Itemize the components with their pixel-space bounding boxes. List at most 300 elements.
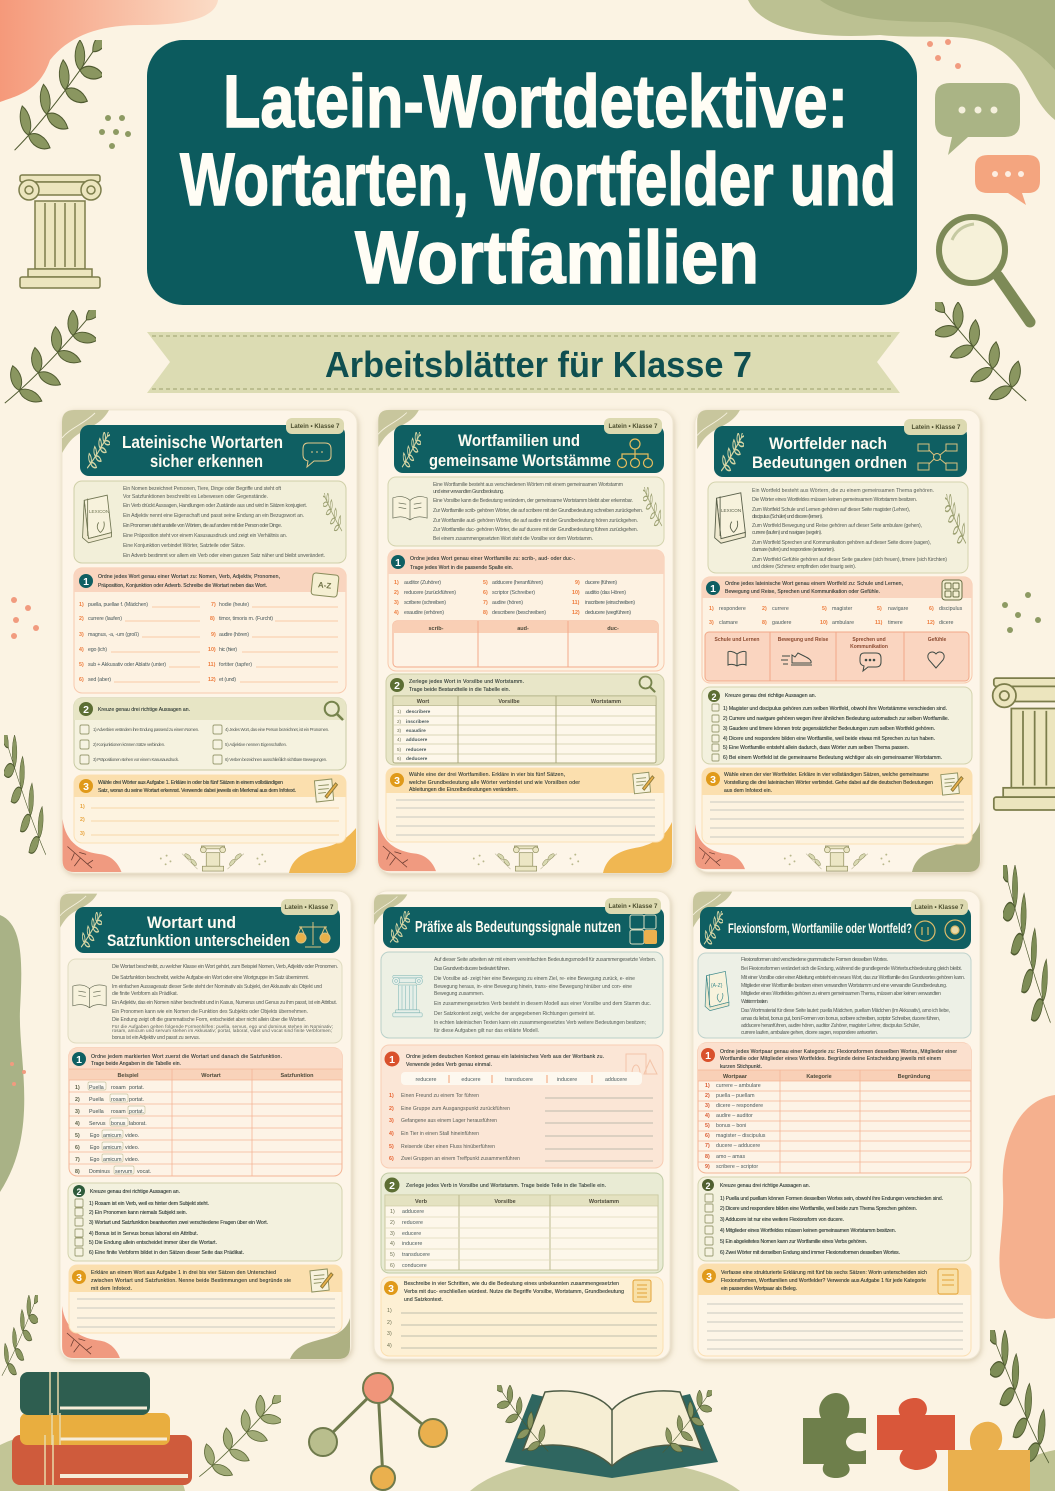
- exercise 3: Verbs mit duc- erschließen würdest. Nutze die Begriffe Vorsilbe, Wortstamm, Grundbedeutung: [404, 1289, 624, 1295]
- info box: Die Vorsilbe ad- zeigt hier eine Bewegung zu einem Ziel, re- eine Bewegung zurück, e- eine: [434, 976, 635, 982]
- exercise 1: 1): [709, 606, 714, 612]
- exercise 1 table: Ordne jedes Wortpaar genau einer Kategorie zu: Flexionsformen desselben Wortes, Mitglieder einer: [720, 1049, 957, 1055]
- exercise 2: 3) Gaudere und timere können trotz gegensätzlicher Bedeutungen zum selben Wortfeld gehören.: [723, 726, 935, 732]
- exercise 2: deducere: [406, 756, 428, 762]
- exercise 1: Trage jedes Wort in die passende Spalte ein.: [410, 565, 513, 571]
- exercise 3: 2): [387, 1320, 392, 1326]
- exercise 1 table: bonus – boni: [716, 1123, 746, 1129]
- exercise 1 table: Wortpaar: [723, 1074, 748, 1080]
- exercise 2: [68, 1183, 342, 1261]
- exercise 2: reducere: [406, 747, 427, 753]
- info box: [381, 952, 663, 1038]
- exercise 1: 11): [208, 662, 216, 668]
- info box: und einer verwandten Grundbedeutung.: [433, 489, 504, 495]
- exercise 1: ego (ich): [88, 647, 107, 653]
- exercise 3: Satz, woran du seine Wortart erkennst. Verwende dabei jeweils ein Merkmal aus dem Infotext.: [98, 788, 296, 794]
- exercise 3: Erkläre an einem Wort aus Aufgabe 1 in drei bis vier Sätzen den Unterschied: [91, 1270, 276, 1276]
- exercise 1: discipulus: [939, 606, 963, 612]
- exercise 1 table: Wortart: [201, 1073, 221, 1079]
- exercise 2: inducere: [402, 1241, 422, 1247]
- exercise 1: inscribere (einschreiben): [585, 600, 635, 606]
- header: Satzfunktion unterscheiden: [107, 931, 290, 950]
- exercise 1: 2): [394, 590, 399, 596]
- exercise 2: 2): [397, 719, 402, 724]
- panel: worksheet 6 Flexionsform: [693, 891, 980, 1359]
- exercise 1: 1: [395, 557, 401, 569]
- exercise 1 table: Wortfamilie oder Mitglieder eines Wortfeldes. Begründe deine Entscheidung jeweils mit einem: [720, 1056, 941, 1062]
- info box: amas du liebst, bonus gut, boni Formen von bonus, scribere schreiben, scriptor Schreiber, ducere führen,: [741, 1016, 940, 1022]
- exercise 3: 1): [80, 804, 85, 810]
- header: Wortfelder nach: [769, 434, 887, 453]
- header: gemeinsame Wortstämme: [429, 451, 611, 470]
- exercise 1: 11): [572, 600, 580, 606]
- exercise 1 table: kurzen Stichpunkt.: [720, 1064, 762, 1070]
- header: sicher erkennen: [150, 451, 263, 471]
- exercise 1: scrib-: [429, 626, 444, 632]
- exercise 1 table: Ordne jedem markierten Wort zuerst die Wortart und danach die Satzfunktion.: [91, 1054, 282, 1060]
- exercise 3: 3): [387, 1331, 392, 1337]
- info box: Das Wortmaterial für diese Seite lautet: puella Mädchen, puellam Mädchen (im Akkusativ), amo ich liebe,: [741, 1008, 950, 1014]
- exercise 2: Kreuze genau drei richtige Aussagen an.: [720, 1183, 810, 1189]
- exercise 1 table: 1): [75, 1085, 80, 1091]
- exercise 2: 2) Ein Pronomen kann niemals Subjekt sein.: [89, 1210, 187, 1216]
- info box: Mit einer Vorsilbe oder einer Ableitung entsteht ein neues Wort, das zur Wortfamilie des Grundwortes gehören kann.: [741, 975, 965, 981]
- exercise 1: scribere (schreiben): [404, 600, 446, 606]
- exercise 1 table: Ego: [90, 1157, 99, 1163]
- info box: Zum Wortfeld Bewegung und Reise gehören auf dieser Seite ambulare (gehen),: [752, 523, 922, 529]
- info box: Ein Adjektiv, das ein Nomen näher beschreibt und in Kasus, Numerus und Genus zu ihm passt, ist ein Attribut.: [112, 1000, 337, 1006]
- exercise 3: 4): [387, 1343, 392, 1349]
- info box: [388, 477, 664, 546]
- exercise 2: 2: [394, 680, 400, 692]
- exercise 2: describere: [406, 709, 431, 715]
- exercise 1 table: 8): [705, 1154, 710, 1160]
- exercise 1 table: video.: [125, 1157, 139, 1163]
- exercise 1 table: 2): [75, 1097, 80, 1103]
- exercise 1: Kommunikation: [850, 644, 888, 650]
- exercise 1: [388, 550, 664, 671]
- exercise 1 table: scribere – scriptor: [716, 1164, 758, 1170]
- exercise 3: Vorstellung die drei lateinischen Wörter verbindet. Gehe dabei auf die deutschen Bedeutungen: [724, 780, 933, 786]
- exercise 1 table: Trage beide Angaben in die Tabelle ein.: [91, 1061, 181, 1067]
- info box: [68, 959, 342, 1043]
- info box: Im einfachen Aussagesatz dieser Seite steht der Nominativ als Subjekt, der Akkusativ als Objekt und: [112, 984, 322, 990]
- exercise 2: [702, 687, 972, 764]
- exercise 2: 5) Adjektive nennen Eigenschaften.: [225, 742, 287, 747]
- exercise 1 table: 8): [75, 1169, 80, 1175]
- exercise 2: Vorsilbe: [494, 1199, 516, 1205]
- info box: Die Wörter eines Wortfeldes müssen keinen gemeinsamen Wortstamm besitzen.: [752, 497, 917, 503]
- exercise 2: 1) Puella und puellam können Formen desselben Wortes sein, obwohl ihre Endungen verschieden sind.: [720, 1196, 943, 1202]
- exercise 1: timor, timoris m. (Furcht): [219, 616, 273, 622]
- icon: branch bottom left: [2, 1285, 43, 1378]
- exercise 1: 6): [389, 1156, 394, 1162]
- exercise 2: 6): [397, 756, 402, 761]
- exercise 1 table: portat.: [129, 1085, 144, 1091]
- exercise 1: 5): [877, 606, 882, 612]
- exercise 1 table: 9): [705, 1164, 710, 1170]
- title panel: [147, 40, 917, 305]
- info box: die finite Verbform als Prädikat.: [112, 991, 178, 997]
- exercise 2: 2: [705, 1181, 711, 1191]
- exercise 1 table: 5): [705, 1123, 710, 1129]
- exercise 1: reducere: [416, 1077, 437, 1083]
- exercise 1: 1): [394, 580, 399, 586]
- info box: Wortstamm besitzen.: [741, 999, 768, 1005]
- info box: Zum Wortfeld Sprechen und Kommunikation gehören auf dieser Seite dicere (sagen),: [752, 540, 931, 546]
- exercise 2: 3) Präpositionen stehen vor einem Kasusausdruck.: [93, 757, 179, 762]
- header: Latein • Klasse 7: [291, 423, 340, 430]
- exercise 2: educere: [402, 1231, 421, 1237]
- exercise 1: Präposition, Konjunktion oder Adverb. Schreibe die Wortart neben das Wort.: [98, 583, 267, 589]
- exercise 2: 5) Eine Wortfamilie entsteht allein dadurch, dass Wörter zum selben Thema passen.: [723, 745, 909, 751]
- exercise 1 table: 4): [705, 1113, 710, 1119]
- exercise 2: [381, 1173, 663, 1273]
- exercise 1: 10): [820, 620, 828, 626]
- exercise 2: [386, 674, 664, 765]
- exercise 1: 4): [394, 610, 399, 616]
- exercise 2: Wort: [417, 699, 429, 705]
- icon: column left: [19, 175, 101, 288]
- info box: für diese Aufgaben gilt nur das erklärte Modell.: [434, 1028, 539, 1034]
- icon: branch left middle: [0, 720, 46, 858]
- exercise 3: Verfasse eine strukturierte Erklärung mit fünf bis sechs Sätzen: Worin unterscheiden sich: [721, 1270, 927, 1276]
- exercise 3: [74, 775, 346, 843]
- info box: Eine Wortfamilie besteht aus verschiedenen Wörtern mit einem gemeinsamen Wortstamm: [433, 482, 623, 488]
- exercise 1 table: rosam: [111, 1097, 126, 1103]
- info box: adducere heranführen, audire hören, auditor Zuhörer, magister Lehrer, discipulus Schüler,: [741, 1023, 920, 1029]
- header: [383, 898, 664, 948]
- info box: Flexionsformen sind verschiedene grammatische Formen desselben Wortes.: [741, 957, 888, 963]
- header: Latein • Klasse 7: [609, 903, 658, 910]
- exercise 3: Ableitungen die Einzelbedeutungen verändern.: [409, 787, 518, 793]
- info box: Die Wortart beschreibt, zu welcher Klasse ein Wort gehört, zum Beispiel Nomen, Verb, Adjektiv oder Pronomen.: [112, 964, 338, 970]
- exercise 1: auditor (Zuhörer): [404, 580, 441, 586]
- exercise 1: adducere: [605, 1077, 627, 1083]
- exercise 1: adducere (heranführen): [492, 580, 543, 586]
- exercise 1 table: Ego: [90, 1145, 99, 1151]
- info box: Der Satzkontext zeigt, welche der angegebenen Richtungen gemeint ist.: [434, 1011, 595, 1017]
- icon: puzzle pieces: [803, 1393, 1030, 1491]
- exercise 1: gaudere: [772, 620, 791, 626]
- exercise 1: educere: [461, 1077, 481, 1083]
- exercise 2: 3) Adducere ist nur eine weitere Flexionsform von ducere.: [720, 1217, 844, 1223]
- panel: worksheet 4 Wortart und Satzfunktion: [60, 891, 351, 1359]
- exercise 1 table: 6): [705, 1133, 710, 1139]
- exercise 1 table: puella – puellam: [716, 1093, 755, 1099]
- exercise 2: 1) Magister und discipulus gehören zum selben Wortfeld, obwohl ihre Wortstämme verschieden sind.: [723, 706, 947, 712]
- exercise 1: [702, 577, 972, 683]
- header: Latein • Klasse 7: [915, 904, 964, 911]
- exercise 1: scriptor (Schreiber): [492, 590, 535, 596]
- subtitle text: Arbeitsblätter für Klasse 7: [325, 344, 752, 385]
- exercise 1: 1: [389, 1054, 395, 1066]
- exercise 2: Zerlege jedes Wort in Vorsilbe und Wortstamm.: [409, 679, 524, 685]
- info box: discipulus (Schüler) und discere (lernen).: [752, 514, 823, 520]
- exercise 2: Verb: [415, 1199, 428, 1205]
- icon: branch bottom centre: [199, 1385, 291, 1479]
- exercise 1 table: laborat.: [129, 1121, 147, 1127]
- exercise 1 table: Beispiel: [117, 1073, 139, 1079]
- exercise 1 table: rosam: [111, 1109, 126, 1115]
- exercise 2: [698, 1177, 971, 1261]
- header: Flexionsform, Wortfamilie oder Wortfeld?: [728, 921, 912, 936]
- info box: Das Grundverb ducere bedeutet führen.: [434, 966, 510, 972]
- exercise 1: 2): [762, 606, 767, 612]
- exercise 2: Wortstamm: [589, 1199, 619, 1205]
- exercise 1: [381, 1045, 663, 1168]
- exercise 1: 1: [83, 576, 89, 588]
- exercise 3: 3: [706, 1271, 712, 1283]
- exercise 2: 4) Bonus ist in Servus bonus laborat ein Attribut.: [89, 1231, 198, 1237]
- info box: Ein Pronomen steht anstelle von Wörtern, die auf andere mit der Person oder Dinge.: [123, 523, 282, 529]
- info box: currere laufen, ambulare gehen, dicere sagen, respondere antworten.: [741, 1030, 878, 1036]
- exercise 2: 2) Currere und navigare gehören wegen ihrer ähnlichen Bedeutung automatisch zur selben Wortfamilie.: [723, 716, 949, 722]
- exercise 1: Eine Gruppe zum Ausgangspunkt zurückführen: [401, 1106, 510, 1112]
- exercise 3: Flexionsformen, Wortfamilien und Wortfelder? Verwende aus Aufgabe 1 für jede Kategorie: [721, 1278, 926, 1284]
- info box: Mitglieder eines Wortfeldes gehören zu einem gemeinsamen Thema, müssen aber keinen verwandten: [741, 991, 941, 997]
- exercise 2: Wortstamm: [591, 699, 621, 705]
- panel: worksheet 5 Präfixe: [374, 891, 670, 1359]
- exercise 1 table: rosam: [111, 1085, 126, 1091]
- exercise 1 table: Dominus: [89, 1169, 110, 1175]
- exercise 1: 9): [575, 580, 580, 586]
- info box: rosam, amicum und servum stehen im Akkusativ; portat, laborat, videt und vocat sind finite Verbformen;: [112, 1028, 332, 1033]
- exercise 1: navigare: [888, 606, 908, 612]
- exercise 2: 3): [390, 1231, 395, 1237]
- info box: Zur Wortfamilie scrib- gehören Wörter, die auf scribere mit der Grundbedeutung schreiben zurückgehen.: [433, 508, 643, 514]
- exercise 1: timere: [888, 620, 903, 626]
- exercise 1: 2): [389, 1106, 394, 1112]
- info box: Ein Verb drückt Aussagen, Handlungen oder Zustände aus und wird in Sätzen konjugiert.: [123, 503, 307, 509]
- exercise 1: 12): [208, 677, 216, 683]
- exercise 1 table: 1: [76, 1054, 82, 1066]
- exercise 1: hic (hier): [219, 647, 237, 653]
- exercise 1: 5): [79, 662, 84, 668]
- exercise 1: 1): [389, 1093, 394, 1099]
- info box: Bewegung heraus, in- eine Bewegung hinein, trans- eine Bewegung hinüber und con- eine: [434, 984, 632, 990]
- info box: Bewegung zusammen.: [434, 991, 484, 997]
- exercise 1: transducere: [505, 1077, 533, 1083]
- exercise 2: conducere: [402, 1263, 427, 1269]
- exercise 1 table: Puella: [89, 1085, 104, 1091]
- exercise 1: 7): [483, 600, 488, 606]
- exercise 2: Kreuze genau drei richtige Aussagen an.: [725, 693, 816, 699]
- exercise 2: 6) Zwei Wörter mit derselben Endung sind immer Flexionsformen desselben Wortes.: [720, 1250, 900, 1256]
- icon: magnifier: [939, 217, 1030, 322]
- exercise 2: exaudire: [406, 728, 426, 734]
- exercise 1 table: audire – auditor: [716, 1113, 753, 1119]
- exercise 2: 6) Bei einem Wortfeld ist die gemeinsame Bedeutung wichtiger als ein gemeinsamer Wortstamm.: [723, 755, 942, 761]
- exercise 3: [702, 768, 972, 844]
- exercise 3: welche Grundbedeutung alle Wörter verbindet und wie Vorsilben oder: [409, 780, 580, 786]
- info box: {A-Z}: [711, 983, 723, 989]
- info box: Für die Aufgaben gelten folgende Formenhilfen: puella, servus, ego und dominus stehen im Nominativ;: [112, 1024, 333, 1029]
- exercise 1 table: servum: [115, 1169, 133, 1175]
- icon: branch right: [923, 289, 1026, 404]
- exercise 1: describere (beschreiben): [492, 610, 546, 616]
- exercise 1 table: amicum: [103, 1133, 122, 1139]
- info box: Eine Präposition steht vor einem Kasusausdruck und zeigt ein Verhältnis an.: [123, 533, 287, 539]
- exercise 1 table: Puella: [89, 1109, 104, 1115]
- exercise 3: Wähle eine der drei Wortfamilien. Erkläre in vier bis fünf Sätzen,: [409, 772, 565, 778]
- exercise 1 table: Servus: [89, 1121, 106, 1127]
- exercise 1: 3): [79, 632, 84, 638]
- exercise 1 table: 1): [705, 1083, 710, 1089]
- panel: worksheet 3 Wortfelder: [695, 410, 980, 872]
- exercise 3: 1): [387, 1308, 392, 1314]
- exercise 1 table: 6): [75, 1145, 80, 1151]
- header: Latein • Klasse 7: [609, 423, 658, 430]
- exercise 2: Trage beide Bestandteile in die Tabelle ein.: [409, 687, 510, 693]
- exercise 1: 6): [79, 677, 84, 683]
- exercise 1 table: portat.: [129, 1109, 144, 1115]
- exercise 1: sed (aber): [88, 677, 111, 683]
- exercise 1: 10): [208, 647, 216, 653]
- exercise 1 table: 5): [75, 1133, 80, 1139]
- info box: Ein zusammengesetztes Verb besteht in diesem Modell aus einer Vorsilbe und dem Stamm duc.: [434, 1001, 651, 1007]
- exercise 2: 2: [76, 1187, 82, 1197]
- exercise 2: 4) Dicere und respondere bilden eine Wortfamilie, weil beide etwas mit Sprechen zu tun haben.: [723, 736, 935, 742]
- exercise 3: mit dem Infotext.: [91, 1286, 132, 1292]
- exercise 1: Ordne jedes lateinische Wort genau einem Wortfeld zu: Schule und Lernen,: [725, 581, 903, 587]
- exercise 1: 2): [79, 616, 84, 622]
- exercise 2: transducere: [402, 1252, 430, 1258]
- exercise 1 table: magister – discipulus: [716, 1133, 766, 1139]
- exercise 2: Zerlege jedes Verb in Vorsilbe und Wortstamm. Trage beide Teile in die Tabelle ein.: [406, 1183, 606, 1189]
- exercise 2: 2) Dicere und respondere bilden eine Wortfamilie, weil beide zum Thema Sprechen gehören.: [720, 1206, 917, 1212]
- title text: Wortfamilien: [355, 216, 759, 299]
- exercise 3: Wähle drei Wörter aus Aufgabe 1. Erkläre in oder bis fünf Sätzen in einem vollständigen: [98, 780, 283, 786]
- exercise 1: 3): [709, 620, 714, 626]
- exercise 1: ducere (führen): [585, 580, 617, 586]
- header: Präfixe als Bedeutungssignale nutzen: [415, 919, 621, 936]
- info box: und dolere (Schmerz empfinden oder traurig sein).: [752, 564, 856, 570]
- exercise 1: 3): [389, 1118, 394, 1124]
- exercise 1: 10): [572, 590, 580, 596]
- exercise 1: puella, puellae f. (Mädchen): [88, 602, 148, 608]
- exercise 2: inscribere: [406, 719, 429, 725]
- exercise 1: exaudire (erhören): [404, 610, 444, 616]
- info box: bonus ist ein Adjektiv und passt zu servus.: [112, 1035, 200, 1041]
- exercise 2: 4) Jedes Wort, das eine Person bezeichnet, ist ein Pronomen.: [225, 727, 329, 732]
- info box: Bei einem zusammengesetzten Wort steht die Vorsilbe vor dem Wortstamm.: [433, 536, 593, 542]
- exercise 1: respondere: [719, 606, 746, 612]
- exercise 1: Bewegung und Reise: [778, 637, 828, 643]
- info box: Zur Wortfamilie duc- gehören Wörter, die auf ducere mit der Grundbedeutung führen zurückgehen.: [433, 527, 638, 533]
- exercise 1 table: Satzfunktion: [280, 1073, 314, 1079]
- exercise 2: 2: [83, 704, 89, 716]
- header: Latein • Klasse 7: [285, 904, 334, 911]
- header: [394, 418, 664, 473]
- exercise 1: ambulare: [832, 620, 854, 626]
- title text: Latein-Wortdetektive:: [223, 60, 848, 143]
- exercise 1: 6): [929, 606, 934, 612]
- exercise 1: Reisende über einen Fluss hinüberführen: [401, 1144, 495, 1150]
- exercise 3: 2): [80, 817, 85, 823]
- exercise 1 table: amicum: [103, 1145, 122, 1151]
- exercise 2: 1) Rosam ist ein Verb, weil es hinter dem Subjekt steht.: [89, 1201, 209, 1207]
- exercise 3: 3: [76, 1272, 82, 1284]
- exercise 1: audire (hören): [492, 600, 523, 606]
- icon: open book: [505, 1391, 718, 1478]
- exercise 1: Ordne jedem deutschen Kontext genau ein lateinisches Verb aus der Wortbank zu.: [406, 1054, 604, 1060]
- info box: [74, 481, 346, 563]
- exercise 1: currere (laufen): [88, 616, 122, 622]
- exercise 2: 5) Ein abgeleitetes Nomen kann zur Wortfamilie eines Verbs gehören.: [720, 1239, 867, 1245]
- exercise 2: Kreuze genau drei richtige Aussagen an.: [90, 1189, 180, 1195]
- exercise 1: [74, 568, 346, 693]
- subtitle ribbon: [147, 332, 900, 393]
- exercise 3: und Satzkontext.: [404, 1297, 443, 1303]
- info box: Ein Nomen bezeichnet Personen, Tiere, Dinge oder Begriffe und steht oft: [123, 486, 282, 492]
- exercise 1: 5): [822, 606, 827, 612]
- info box: Auf dieser Seite arbeiten wir mit einem vereinfachten Bedeutungsmodell für zusammengesetzte Verben.: [434, 957, 656, 963]
- exercise 3: Wähle einen der vier Wortfelder. Erkläre in vier vollständigen Sätzen, welche gemeinsame: [724, 772, 929, 778]
- exercise 2: 3): [397, 728, 402, 733]
- header: [714, 419, 967, 477]
- info box: Zur Wortfamilie aud- gehören Wörter, die auf audire mit der Grundbedeutung hören zurückgehen.: [433, 518, 638, 524]
- exercise 3: 3): [80, 831, 85, 837]
- info box: LEXICON: [721, 508, 741, 513]
- exercise 2: Kreuze genau drei richtige Aussagen an.: [98, 707, 190, 713]
- info box: Eine Konjunktion verbindet Wörter, Satzteile oder Sätze.: [123, 543, 245, 549]
- exercise 2: 3) Wortart und Satzfunktion beantworten zwei verschiedene Fragen über ein Wort.: [89, 1220, 268, 1226]
- exercise 1: sub + Akkusativ oder Ablativ (unter): [88, 662, 166, 668]
- exercise 2: 2) Konjunktionen können Sätze verbinden.: [93, 742, 165, 747]
- exercise 3: 3: [83, 781, 89, 793]
- exercise 1: Gefangene aus einem Lager herausführen: [401, 1118, 497, 1124]
- exercise 1: auditio (das Hören): [585, 590, 626, 596]
- exercise 1: 8): [483, 610, 488, 616]
- exercise 3: aus dem Infotext ein.: [724, 788, 772, 794]
- info box: Die Satzfunktion beschreibt, welche Aufgabe ein Wort oder eine Wortgruppe im Satz übernimmt.: [112, 975, 309, 981]
- exercise 1: inducere: [557, 1077, 577, 1083]
- exercise 1: Zwei Gruppen an einem Treffpunkt zusammenführen: [401, 1156, 520, 1162]
- exercise 2: 4): [390, 1241, 395, 1247]
- exercise 1 table: Ego: [90, 1133, 99, 1139]
- exercise 1 table: 1: [705, 1050, 711, 1062]
- exercise 1: 12): [572, 610, 580, 616]
- exercise 1 table: ducere – adducere: [716, 1143, 760, 1149]
- exercise 2: 6) Eine finite Verbform bildet in den Sätzen dieser Seite das Prädikat.: [89, 1250, 244, 1256]
- exercise 1: 6): [483, 590, 488, 596]
- exercise 3: 3: [394, 775, 400, 787]
- exercise 1 table: Puella: [89, 1097, 104, 1103]
- exercise 1: 7): [211, 602, 216, 608]
- header: [700, 899, 971, 949]
- exercise 2: 1): [397, 709, 402, 714]
- exercise 1: fortiter (tapfer): [219, 662, 252, 668]
- exercise 1: magnus, -a, -um (groß): [88, 632, 139, 638]
- info box: Zum Wortfeld Schule und Lernen gehören auf dieser Seite magister (Lehrer),: [752, 507, 910, 513]
- exercise 1: magister: [832, 606, 853, 612]
- icon: branch top left: [15, 26, 113, 153]
- exercise 1: 1): [79, 602, 84, 608]
- exercise 1: 12): [927, 620, 935, 626]
- header: Bedeutungen ordnen: [752, 453, 907, 472]
- exercise 1: clamare: [719, 620, 738, 626]
- info box: Mitglieder einer Wortfamilie besitzen einen verwandten Wortstamm und eine verwandte Grundbedeutung.: [741, 983, 947, 989]
- icon: branch bottom right: [982, 1313, 1049, 1467]
- panel: worksheet 2 Wortfamilien: [378, 410, 673, 873]
- exercise 1 table: 2): [705, 1093, 710, 1099]
- exercise 1 table: [69, 1048, 342, 1176]
- exercise 1: currere: [772, 606, 789, 612]
- exercise 1 table: 3): [705, 1103, 710, 1109]
- exercise 1: duc-: [607, 626, 619, 632]
- exercise 1: audire (hören): [219, 632, 249, 638]
